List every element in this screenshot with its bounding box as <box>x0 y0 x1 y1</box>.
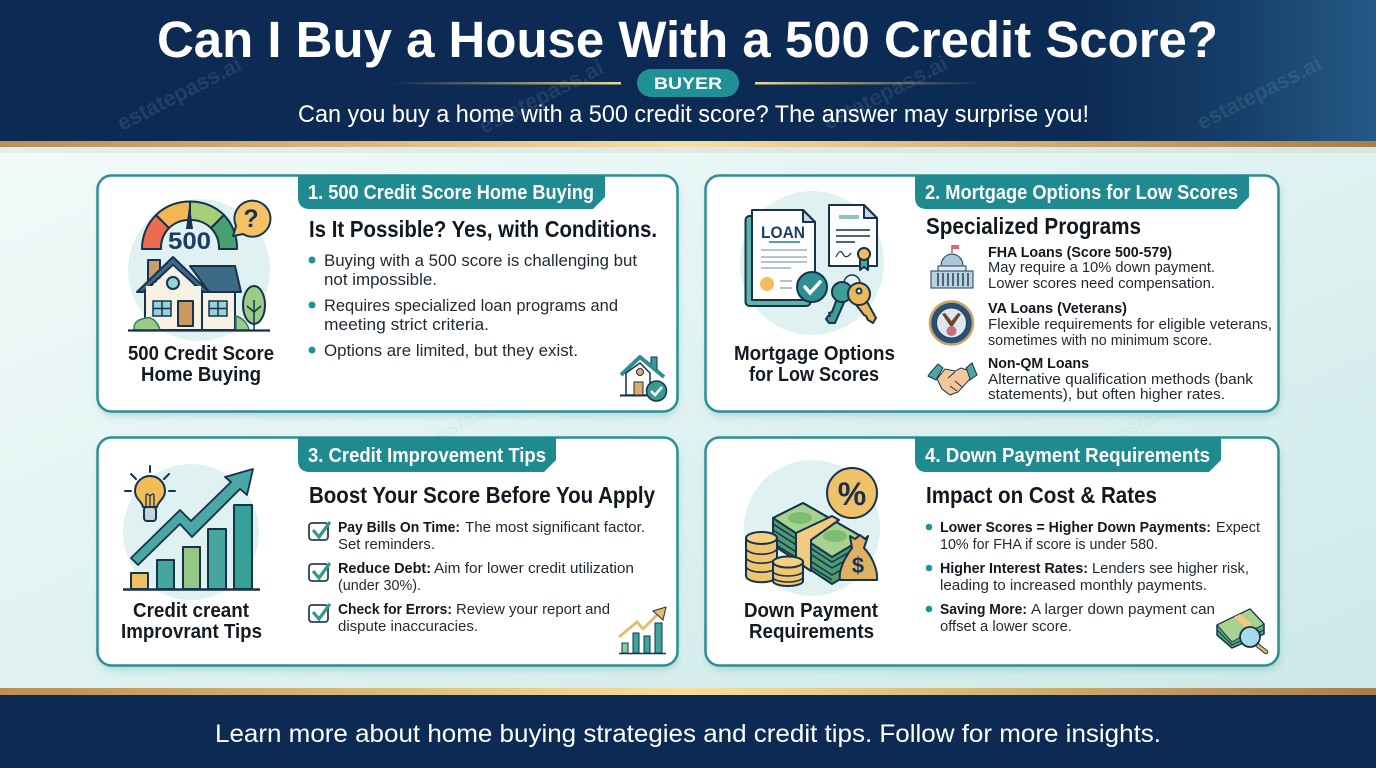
illustration: loan documents and keys <box>740 191 884 335</box>
checklist item: check errors: dispute inaccuracies. <box>338 618 478 635</box>
program: Non-QM loans: statements), but often higher rates. <box>988 386 1225 403</box>
checklist item: reduce debt: (under 30%). <box>338 577 421 594</box>
checklist item: check errors <box>309 601 610 635</box>
checklist item: pay bills: The most significant factor. <box>465 519 645 536</box>
bullet list 1: Requires specialized loan programs and <box>324 297 618 315</box>
bullet: higher interest rates: Higher Interest Rates: <box>940 560 1088 577</box>
checklist item: check errors: Check for Errors: <box>338 601 452 618</box>
illustration caption 1: Home Buying <box>141 364 261 386</box>
title: Can I Buy a House With a 500 Credit Score? <box>157 11 1218 68</box>
illustration: loan documents and keys: LOAN <box>761 223 805 242</box>
percent badge: % <box>838 476 866 512</box>
checklist item: reduce debt: Reduce Debt: <box>338 560 431 577</box>
panel 3: credit improvement tips <box>98 437 678 670</box>
illustration caption 2 <box>734 343 895 386</box>
cash stack <box>773 503 864 584</box>
illustration caption 4 <box>744 600 878 643</box>
illustration caption 2: for Low Scores <box>749 364 879 386</box>
divider right <box>755 82 985 84</box>
program: Non-QM loans <box>928 355 1254 403</box>
bullet: saving more: A larger down payment can <box>1031 601 1215 618</box>
watermark: body: estatepass.ai <box>433 371 556 445</box>
icon: small growth chart <box>619 607 666 654</box>
panel 1: 500 credit score home buying <box>98 175 678 416</box>
tab heading 3 <box>298 437 556 472</box>
bullet list 1: meeting strict criteria. <box>324 316 489 334</box>
icon: handshake <box>928 363 977 395</box>
heading 3: Boost Your Score Before You Apply <box>309 482 655 508</box>
trend arrow <box>131 469 253 565</box>
program: VA loans: Flexible requirements for eligible veterans, <box>988 316 1272 333</box>
bullet: saving more: Saving More: <box>940 601 1027 618</box>
icon: house with check <box>620 357 666 401</box>
lightbulb <box>125 466 175 521</box>
program: Non-QM loans: Non-QM Loans <box>988 355 1089 372</box>
program: FHA loans <box>931 244 1215 292</box>
watermark: header: estatepass.ai <box>475 54 607 138</box>
illustration: gauge and house: 500 <box>168 228 211 255</box>
heading 2: Specialized Programs <box>926 213 1141 239</box>
program: VA loans: VA Loans (Veterans) <box>988 300 1127 317</box>
bars <box>123 505 260 590</box>
header banner <box>0 0 1376 153</box>
watermark: header: estatepass.ai <box>113 51 245 135</box>
bullet list 1 <box>308 252 637 360</box>
illustration caption 3: Improvrant Tips <box>121 621 262 643</box>
badge: BUYER <box>637 69 739 97</box>
watermark: body <box>433 371 1236 445</box>
bullet: higher interest rates: Lenders see higher risk, <box>1092 560 1249 577</box>
heading 1: Is It Possible? Yes, with Conditions. <box>309 216 657 242</box>
heading 4: Impact on Cost & Rates <box>926 482 1157 508</box>
program: VA loans <box>930 300 1272 349</box>
tab heading 2 <box>915 175 1249 209</box>
subtitle: Can you buy a home with a 500 credit score? The answer may surprise you! <box>298 101 1089 128</box>
house <box>128 257 270 330</box>
checklist item: pay bills <box>309 519 645 553</box>
program: VA loans: sometimes with no minimum score. <box>988 332 1212 349</box>
coin stacks <box>746 532 803 586</box>
speech bubble question <box>233 201 270 237</box>
check badge <box>797 272 827 302</box>
illustration: money and percent <box>744 460 880 596</box>
bullet: higher interest rates <box>926 560 1249 594</box>
footer text: Learn more about home buying strategies and credit tips. Follow for more insights. <box>215 720 1161 748</box>
money bag: $ <box>852 553 864 578</box>
checklist item: reduce debt: Aim for lower credit utilization <box>434 560 634 577</box>
divider left <box>391 82 621 84</box>
checklist item: pay bills: Set reminders. <box>338 536 435 553</box>
panel 2: mortgage options <box>706 175 1280 416</box>
tab heading 3: 3. Credit Improvement Tips <box>308 445 546 467</box>
bullet: saving more <box>926 601 1215 635</box>
bullet: lower scores: 10% for FHA if score is under 580. <box>940 536 1158 553</box>
icon: cash and magnifier <box>1217 609 1266 652</box>
illustration caption 1: 500 Credit Score <box>128 343 274 365</box>
bullet: higher interest rates: leading to increased monthly payments. <box>940 577 1207 594</box>
illustration caption 2: Mortgage Options <box>734 343 895 365</box>
checklist item: reduce debt <box>309 560 634 594</box>
page background <box>0 140 1376 700</box>
watermark: header <box>113 50 1325 138</box>
illustration: rising bar chart and bulb <box>123 464 260 600</box>
tab heading 4: 4. Down Payment Requirements <box>925 445 1210 467</box>
panel 4: down payment requirements <box>706 437 1280 670</box>
illustration caption 4: Requirements <box>749 621 874 643</box>
footer banner <box>0 688 1376 768</box>
icon: capitol <box>931 245 973 288</box>
bullet: lower scores: Lower Scores = Higher Down Payments: <box>940 519 1211 536</box>
program: FHA loans: FHA Loans (Score 500-579) <box>988 244 1172 261</box>
bullet list 1: Buying with a 500 score is challenging but <box>324 252 637 270</box>
watermark: header: estatepass.ai <box>1193 50 1325 134</box>
program: Non-QM loans: Alternative qualification methods (bank <box>988 371 1254 388</box>
tab heading 1: 1. 500 Credit Score Home Buying <box>308 182 594 204</box>
tab heading 2: 2. Mortgage Options for Low Scores <box>925 182 1238 204</box>
bullet list 1: Options are limited, but they exist. <box>324 342 578 360</box>
bullet: lower scores: Expect <box>1216 519 1261 536</box>
keys <box>826 275 876 323</box>
illustration caption 3: Credit creant <box>133 600 249 622</box>
badge: BUYER: BUYER <box>654 74 722 93</box>
illustration caption 1 <box>128 343 274 386</box>
watermark: body: estatepass.ai <box>1113 371 1236 445</box>
bullet list 1: not impossible. <box>324 271 437 289</box>
program: FHA loans: May require a 10% down payment. <box>988 259 1215 276</box>
illustration caption 4: Down Payment <box>744 600 878 622</box>
checklist item: check errors: Review your report and <box>456 601 610 618</box>
illustration: gauge and house <box>128 199 270 341</box>
bullet: saving more: offset a lower score. <box>940 618 1072 635</box>
tab heading 1 <box>298 175 605 209</box>
program: FHA loans: Lower scores need compensation. <box>988 275 1215 292</box>
checklist item: pay bills: Pay Bills On Time: <box>338 519 460 536</box>
tab heading 4 <box>915 437 1221 472</box>
speech bubble question: ? <box>243 205 259 233</box>
icon: VA seal <box>930 302 973 344</box>
certificate document <box>829 205 877 270</box>
illustration caption 3 <box>121 600 262 643</box>
bullet: lower scores <box>926 519 1261 553</box>
watermark: header: estatepass.ai <box>819 50 951 134</box>
